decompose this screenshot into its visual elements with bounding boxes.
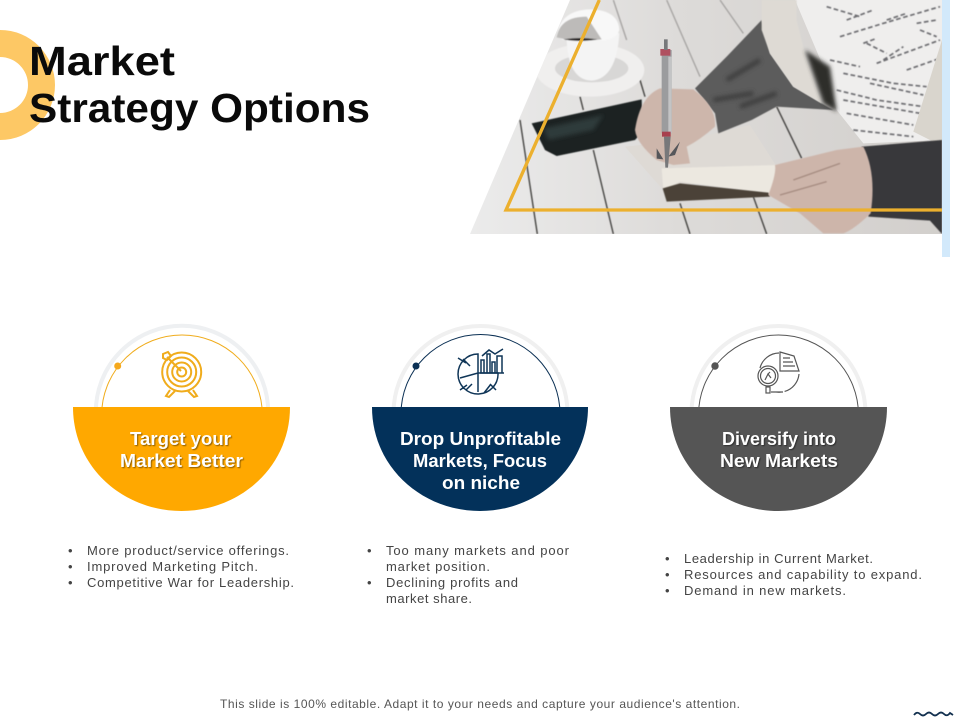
bullet list: target: • — [68, 575, 73, 590]
pen and left hand — [635, 88, 715, 165]
phone — [532, 99, 643, 156]
heading: on niche — [442, 473, 520, 493]
bullet list: target: Improved Marketing Pitch. — [87, 559, 258, 574]
sleeve left — [695, 20, 833, 133]
heading: New Markets — [720, 451, 838, 471]
heading: Target your — [130, 429, 231, 449]
heading — [720, 429, 838, 471]
heading — [120, 429, 243, 471]
saucer and cup — [536, 9, 644, 97]
panel: drop unprofitable markets — [372, 326, 588, 511]
heading: Diversify into — [722, 429, 836, 449]
bullet list: drop: • — [367, 543, 372, 558]
half disc — [670, 407, 887, 511]
bullet list: diversify: Leadership in Current Market. — [684, 551, 873, 566]
heading: Drop Unprofitable — [400, 429, 561, 449]
heading: Market Better — [120, 451, 243, 471]
bullet list: target: • — [68, 559, 73, 574]
half disc — [73, 407, 290, 511]
light blue strip — [942, 0, 950, 257]
right sleeve and hand — [862, 140, 942, 234]
bullet list: drop: market position. — [386, 559, 490, 574]
icon: wave mark — [914, 712, 953, 716]
ring: outer arc — [394, 326, 568, 500]
ring: inner arc with dot — [102, 335, 262, 496]
bullet list: target: More product/service offerings. — [87, 543, 289, 558]
bullet list: drop: • — [367, 575, 372, 590]
half disc — [372, 407, 588, 511]
bullet list: diversify: • — [665, 583, 670, 598]
heading: Markets, Focus — [413, 451, 547, 471]
title: Strategy Options — [29, 85, 370, 131]
icon: pie and magnifier — [758, 352, 799, 393]
yellow triangle outline — [506, 0, 942, 210]
icon: pie with bar chart — [458, 349, 504, 394]
heading — [400, 429, 561, 493]
bullet list: diversify: Resources and capability to expand. — [684, 567, 922, 582]
bullet list: target: Competitive War for Leadership. — [87, 575, 294, 590]
cardigan — [762, 0, 822, 103]
bullet list: diversify: • — [665, 567, 670, 582]
ring: inner arc with dot — [698, 335, 858, 495]
footer note: This slide is 100% editable. Adapt it to your needs and capture your audience's attention. — [220, 697, 740, 711]
bullet list: diversify — [665, 551, 922, 598]
bullet list: drop: market share. — [386, 591, 472, 606]
icon: target with arrow — [162, 352, 201, 397]
bullet list: target — [68, 543, 294, 590]
bullet list: drop: Declining profits and — [386, 575, 518, 590]
title — [29, 38, 370, 131]
bullet list: drop: Too many markets and poor — [386, 543, 570, 558]
title: Market — [29, 38, 175, 84]
bullet list: diversify: • — [665, 551, 670, 566]
panel: diversify into new markets — [670, 326, 887, 511]
bullet list: target: • — [68, 543, 73, 558]
decorative donut — [0, 30, 55, 140]
bullet list: drop — [367, 543, 570, 606]
shirt — [795, 0, 942, 143]
ring: outer arc — [692, 326, 866, 500]
notebook — [626, 146, 631, 152]
panel: target your market better — [73, 326, 290, 511]
photo: hands writing in a notebook at a table — [460, 0, 943, 234]
ring: inner arc with dot — [401, 334, 560, 494]
bullet list: diversify: Demand in new markets. — [684, 583, 846, 598]
ring: outer arc — [96, 326, 268, 498]
